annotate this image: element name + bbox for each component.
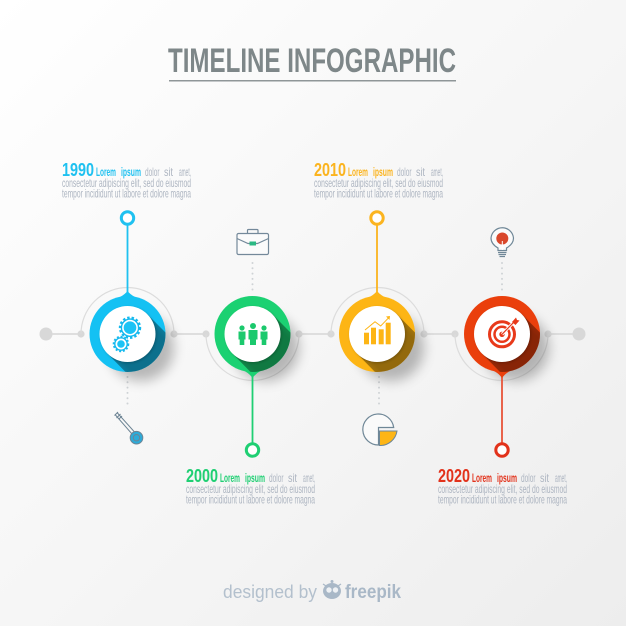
text block: 2000: Lorem <box>220 471 240 485</box>
text: amet, <box>555 471 567 485</box>
text block: 1990: dolor <box>145 165 160 179</box>
dotted connectors <box>128 263 502 406</box>
icon: key <box>114 412 143 444</box>
text block: 2000: 2000 <box>186 465 218 486</box>
text block: 2020: 2020 <box>438 465 470 486</box>
text block: 1990: 1990 <box>62 159 94 180</box>
icon: freepik logo <box>323 580 341 599</box>
text block: 2010: tempor incididunt ut labore et dolore magna <box>314 186 443 200</box>
credit: designed by freepik: designed by <box>223 581 318 602</box>
text block: 2010 <box>314 159 443 200</box>
credit: designed by freepik <box>223 580 401 603</box>
timeline connector <box>40 288 586 380</box>
text: amet, <box>303 471 315 485</box>
text block: 2000: consectetur adipiscing elit, sed do eiusmod <box>186 482 315 496</box>
text block: 2010: consectetur adipiscing elit, sed do eiusmod <box>314 176 443 190</box>
text block: 1990: ipsum <box>121 165 141 179</box>
text block: 2010: 2010 <box>314 159 346 180</box>
milestone 1990 <box>90 212 187 394</box>
milestone 2020 <box>464 296 562 456</box>
text block: 1990: consectetur adipiscing elit, sed do eiusmod <box>62 176 191 190</box>
text block: 2000: dolor <box>269 471 284 485</box>
text block: 2020: Lorem <box>472 471 492 485</box>
text block: 2020 <box>438 465 567 506</box>
text block: 2000 <box>186 465 315 506</box>
milestone 2010 <box>339 212 436 394</box>
text block: 1990 <box>62 159 191 200</box>
text block: 2010: Lorem <box>348 165 368 179</box>
text block: 2020: sit <box>540 471 549 485</box>
text block: 2000: ipsum <box>245 471 265 485</box>
icon: light bulb <box>491 228 514 256</box>
text block: 2000: tempor incididunt ut labore et dolore magna <box>186 492 315 506</box>
icon: briefcase <box>237 230 268 254</box>
icon: people <box>238 323 268 345</box>
text: amet, <box>431 165 443 179</box>
text block: 2010: sit <box>416 165 425 179</box>
credit: designed by freepik: freepik <box>345 582 401 603</box>
milestone 2000 <box>214 296 312 456</box>
text block: 1990: sit <box>164 165 173 179</box>
text block: 2010: dolor <box>397 165 412 179</box>
icon: bar chart <box>364 316 391 344</box>
text block: 1990: Lorem <box>96 165 116 179</box>
text block: 2000: sit <box>288 471 297 485</box>
icon: gears <box>114 318 140 351</box>
icon: target <box>490 318 520 347</box>
text block: 2020: dolor <box>521 471 536 485</box>
title: TIMELINE INFOGRAPHIC <box>168 42 456 80</box>
text: amet, <box>179 165 191 179</box>
text block: 2020: ipsum <box>497 471 517 485</box>
text block: 2010: ipsum <box>373 165 393 179</box>
text block: 1990: tempor incididunt ut labore et dolore magna <box>62 186 191 200</box>
icon: pie chart <box>363 414 397 446</box>
